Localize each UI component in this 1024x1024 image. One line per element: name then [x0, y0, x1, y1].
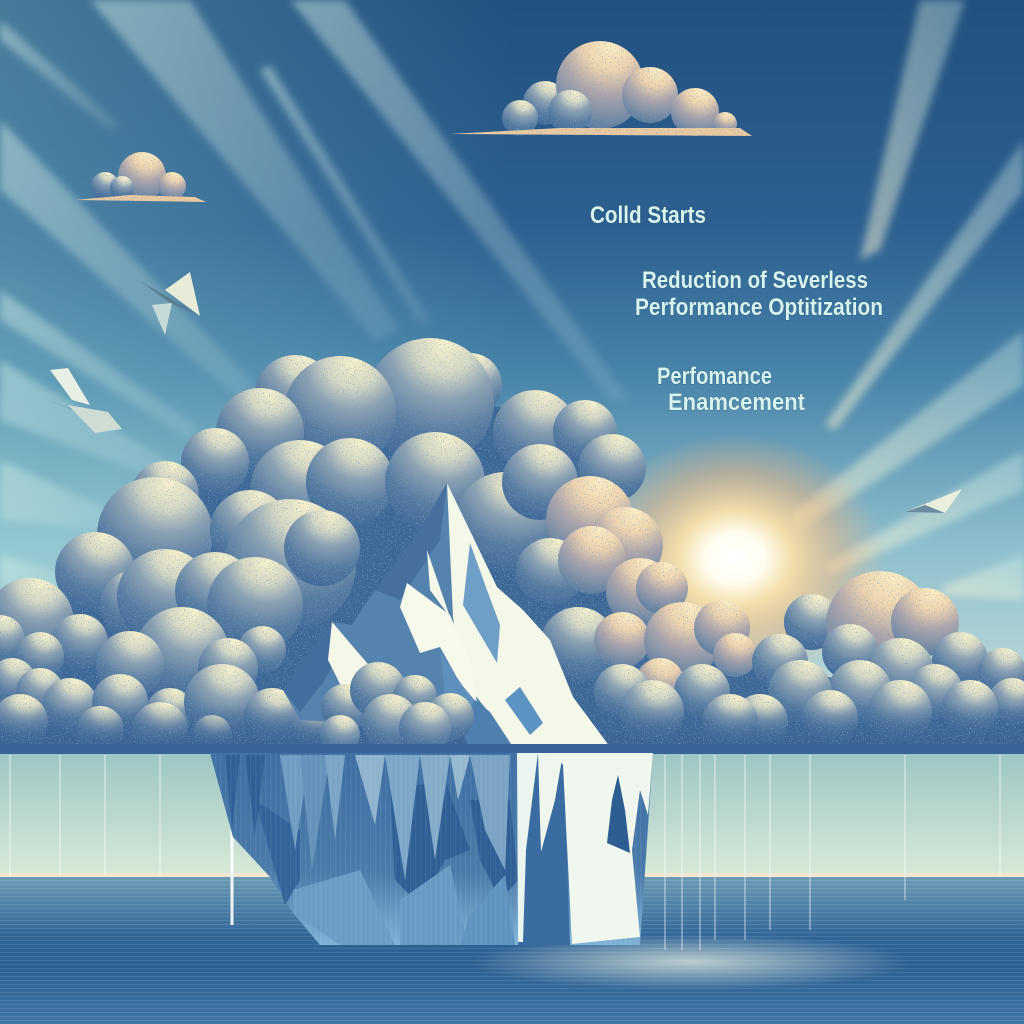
dark hollows	[390, 780, 470, 905]
text: Enamcement: Enamcement	[668, 389, 805, 416]
text: Reduction of Severless: Reduction of Severless	[642, 267, 868, 294]
sun glow	[585, 433, 885, 683]
right dark recess	[518, 753, 570, 945]
text: Performance Optitization: Performance Optitization	[635, 294, 883, 321]
stripes	[210, 753, 650, 945]
front clouds at iceberg foot	[320, 662, 474, 755]
icon: paper plane lower left	[45, 368, 122, 433]
cloud mass	[0, 338, 1024, 758]
lower facets	[293, 870, 395, 945]
text: Cold Starts: Colld Starts	[590, 202, 706, 229]
vertical light streaks	[10, 755, 1000, 950]
icon: paper plane right	[905, 489, 962, 513]
icon: paper plane upper left	[140, 272, 200, 335]
text: Perfomance: Perfomance	[657, 363, 772, 390]
iceberg below water	[210, 753, 653, 945]
white icicles and column	[517, 753, 538, 942]
light rays	[0, 0, 1024, 600]
small top-left cloud	[75, 152, 206, 202]
water band	[0, 744, 1024, 876]
iceberg above water	[283, 483, 610, 753]
sky background	[0, 0, 1024, 760]
icicles	[280, 755, 310, 850]
large top cloud	[450, 41, 752, 136]
sea	[0, 873, 1024, 1024]
